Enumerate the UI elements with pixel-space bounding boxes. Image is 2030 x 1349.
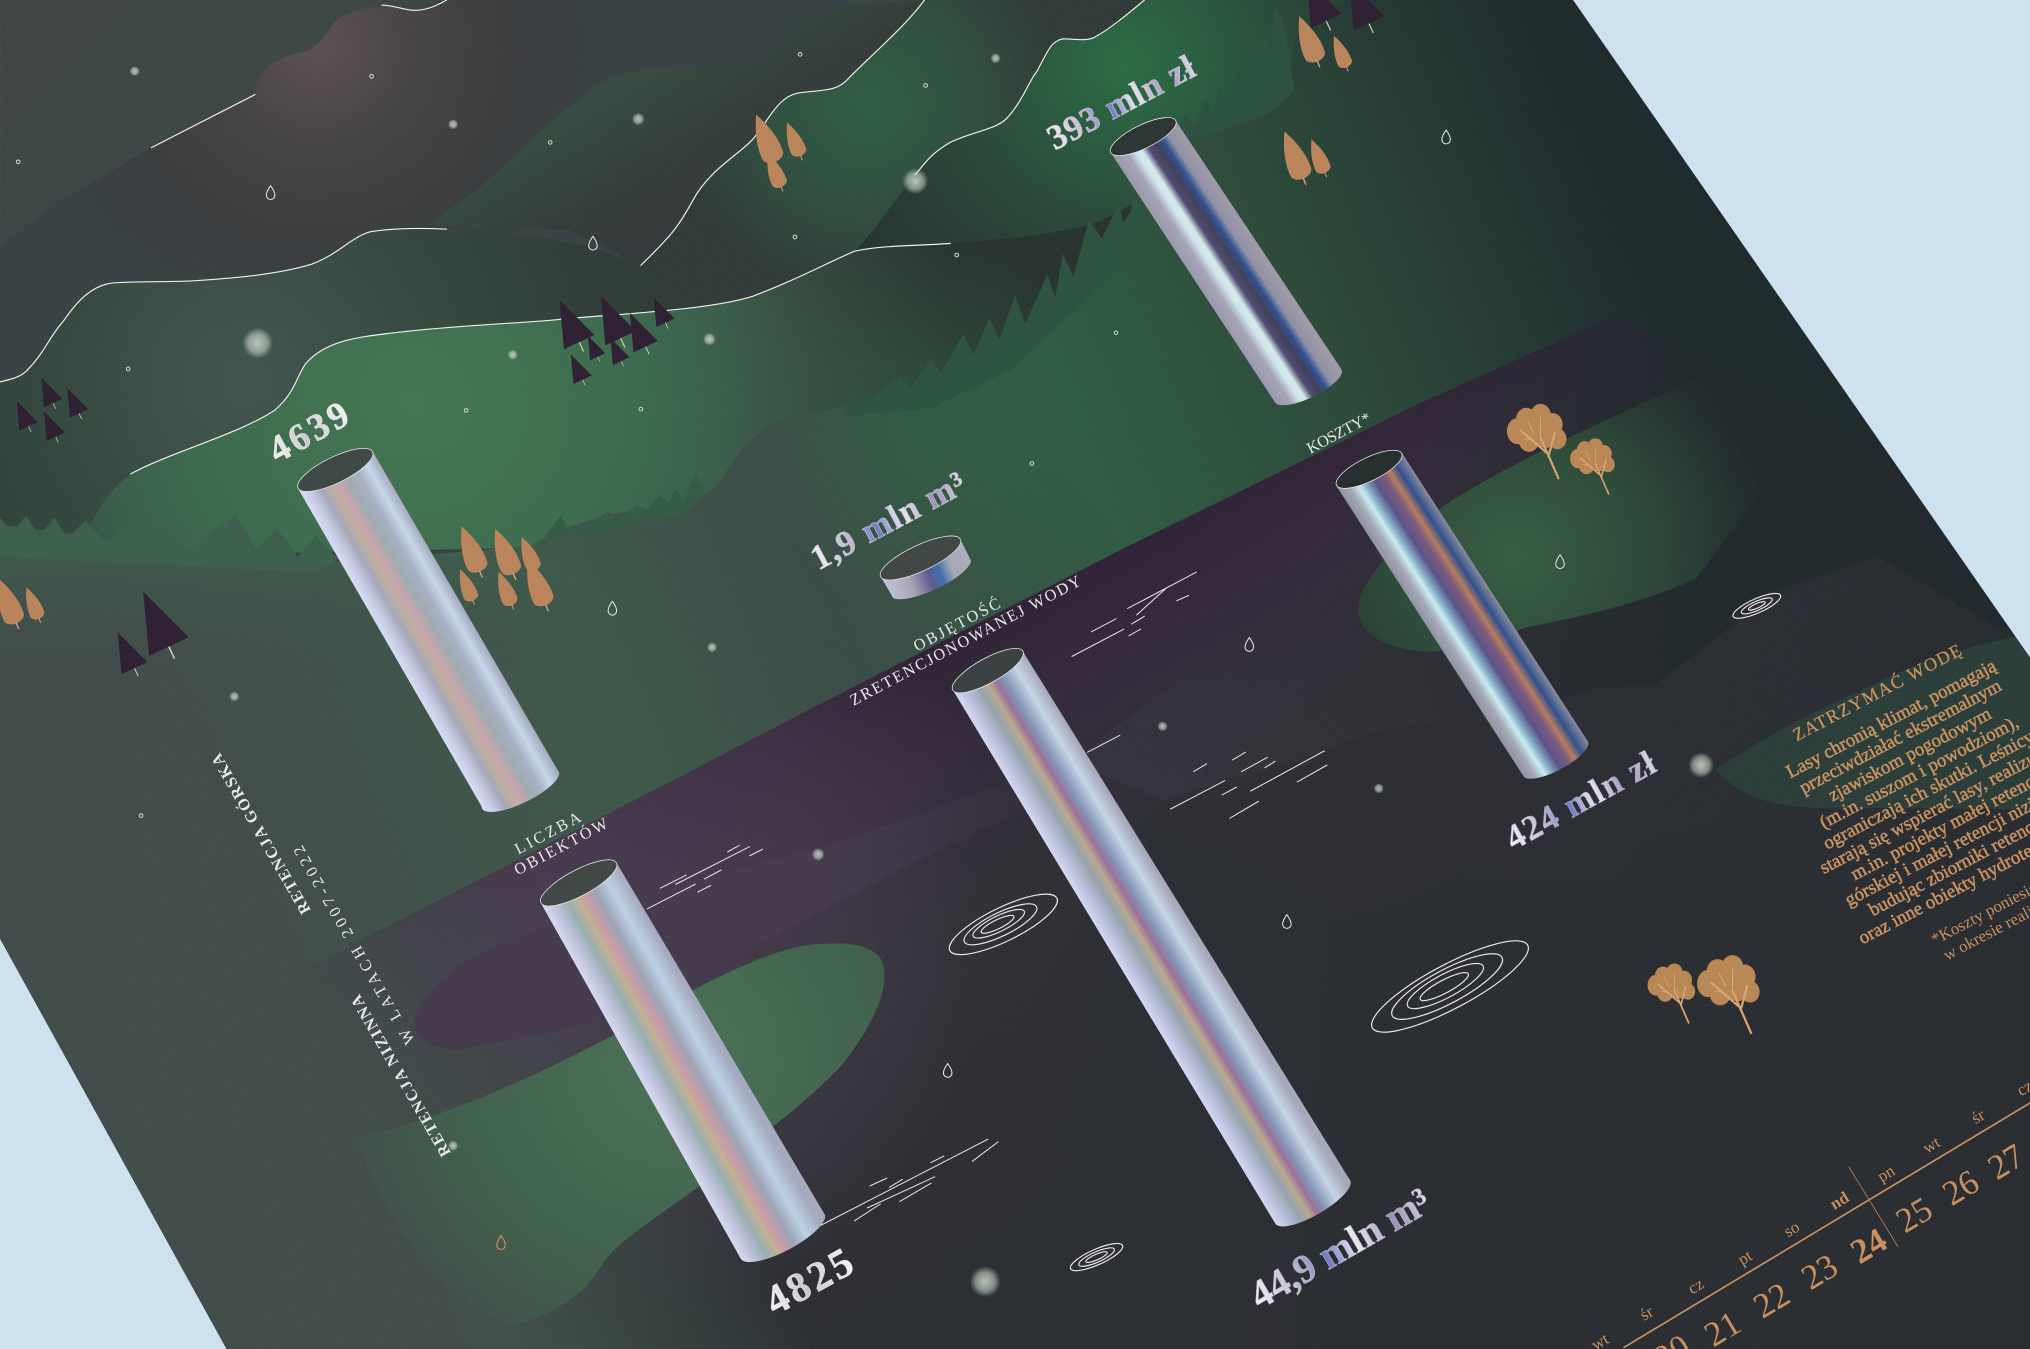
calendar weekdays: pn — [1874, 1161, 1899, 1186]
value: 4825: 4825 — [757, 1238, 861, 1324]
cylinder: mountain retention costs — [1105, 110, 1342, 405]
forest: centre tree line — [540, 490, 700, 544]
calendar strip — [1588, 1076, 2030, 1349]
landscape: top brown-lit mountain — [0, 2, 461, 381]
calendar days: 22 — [1747, 1275, 1797, 1326]
calendar weekdays: cz — [1684, 1274, 1707, 1298]
body text: (m.in. suszom i powodziom), — [1816, 712, 2022, 833]
ripple: bottom small — [1067, 1238, 1126, 1276]
cylinder: lowland retained water volume — [947, 640, 1351, 1226]
lowland: blend of dark hill into the valley — [829, 816, 1321, 1349]
cylinder: lowland retention costs — [1331, 443, 1588, 779]
label: number of objects: OBIEKTÓW — [511, 813, 612, 879]
calendar days: 26 — [1936, 1162, 1986, 1213]
calendar weekdays: so — [1780, 1217, 1803, 1241]
value: 44,9 mln m³: 44,9 mln m³ — [1242, 1178, 1438, 1318]
calendar days: 23 — [1794, 1246, 1845, 1298]
cylinder: mountain retention objects — [292, 440, 559, 812]
landscape: soft band under hills on the left — [0, 525, 216, 584]
waves: central river — [1170, 751, 1327, 818]
contour: steep ridge — [641, 0, 924, 265]
side title: mountain retention: RETENCJA GÓRSKA — [207, 750, 315, 918]
lowland: dark hill lower right — [1295, 777, 2030, 1349]
value: 424 mln zł: 424 mln zł — [1498, 743, 1663, 858]
body text: zjawiskom pogodowym — [1825, 703, 1995, 806]
cylinder: mountain retained water volume disc — [875, 528, 971, 599]
cylinder: lowland retention objects — [535, 851, 825, 1262]
trees: dark conifers lower left — [105, 582, 194, 682]
calendar days — [1647, 1136, 2030, 1349]
calendar weekdays: śr — [1968, 1105, 1988, 1128]
trees: dark conifers top right — [1291, 0, 1389, 40]
calendar days: 24 — [1844, 1220, 1894, 1272]
trees: round copper trees lower right — [1648, 955, 1760, 1034]
forest silhouettes — [0, 64, 1294, 572]
heading: ZATRZYMAĆ WODĘ — [1789, 639, 1965, 745]
contour: second ridge — [0, 228, 447, 382]
side title: period: W LATACH 2007-2022 — [291, 842, 419, 1047]
lowland: lighter bank shape — [1075, 579, 1768, 800]
value: 393 mln zł: 393 mln zł — [1040, 47, 1202, 158]
forest: upper tree line — [1172, 5, 1295, 145]
label: volume of retained water: OBJĘTOŚĆ — [910, 593, 1004, 655]
label: volume of retained water: ZRETENCJONOWANEJ WODY — [847, 573, 1084, 710]
landscape: shadowed middle hill — [427, 0, 924, 265]
waves: bottom — [820, 1139, 998, 1226]
raindrops — [266, 130, 1564, 1077]
label: number of objects: LICZBA — [512, 809, 584, 858]
bokeh light spots — [129, 53, 1714, 1297]
contour: summit — [382, 0, 447, 10]
contour: upper ridge — [151, 95, 255, 148]
patch: faint meadow far right — [1715, 634, 2030, 809]
lowland: dark forested hill — [1144, 557, 2030, 1349]
raindrop: copper — [497, 1236, 505, 1249]
waves: upper river — [1072, 572, 1196, 752]
water wave lines — [647, 572, 1327, 1226]
trees: copper conifers centre-top — [746, 110, 810, 194]
body text: Lasy chronią klimat, pomagają — [1783, 655, 2000, 783]
patch: green meadow lower left — [357, 943, 885, 1326]
calendar weekdays: wt — [1919, 1132, 1944, 1157]
trees: copper conifers beside first cylinder — [452, 522, 558, 615]
body text: przeciwdziałać ekstremalnym — [1796, 675, 2005, 799]
side title: lowland retention: RETENCJA NIZINNA — [348, 991, 455, 1159]
landscape: hill right of steep ridge — [642, 0, 1014, 307]
lowland: left lobe — [414, 764, 1062, 1050]
value: 1,9 mln m³: 1,9 mln m³ — [804, 464, 972, 578]
trees: dark conifers centre — [544, 289, 677, 390]
trees: copper conifers right — [1274, 127, 1334, 189]
landscape: second ridge hill — [0, 229, 656, 518]
contour: right ridge — [915, 0, 1144, 175]
calendar days: 27 — [1981, 1136, 2030, 1187]
calendar weekdays: śr — [1636, 1302, 1657, 1324]
calendar weekdays — [1588, 1076, 2030, 1349]
text block: keep the water — [1755, 599, 2030, 996]
ripple: large right — [1362, 926, 1538, 1047]
calendar weekdays: pt — [1734, 1246, 1756, 1269]
small ring droplets — [16, 53, 1118, 817]
forest: right tree line — [842, 194, 1144, 417]
contour lines — [0, 0, 1144, 474]
ripple: right small — [1730, 589, 1783, 623]
label: costs: KOSZTY* — [1304, 410, 1374, 458]
calendar days: 25 — [1889, 1189, 1939, 1241]
trees: copper conifers left — [0, 574, 48, 633]
lowland base — [155, 317, 2030, 1349]
waves: left river — [647, 845, 763, 909]
calendar weekdays: nd — [1827, 1187, 1853, 1214]
contour: green hill — [131, 243, 950, 474]
trees: round copper trees upper right — [1507, 404, 1615, 495]
patch: green meadow right — [1358, 378, 1761, 652]
landscape: green glow of lower hill — [846, 296, 1006, 406]
trees: dark conifers upper left — [8, 373, 91, 447]
forest: left tree line — [0, 515, 339, 572]
value: 4639: 4639 — [262, 394, 356, 471]
calendar line — [1623, 1103, 2030, 1348]
landscape: bright green hill — [89, 199, 1139, 557]
landscape: bright hill upper right — [856, 0, 1683, 250]
calendar week divider — [1849, 1166, 1898, 1247]
trees: copper conifers top right — [1289, 12, 1355, 74]
ripple: centre left — [942, 883, 1064, 966]
